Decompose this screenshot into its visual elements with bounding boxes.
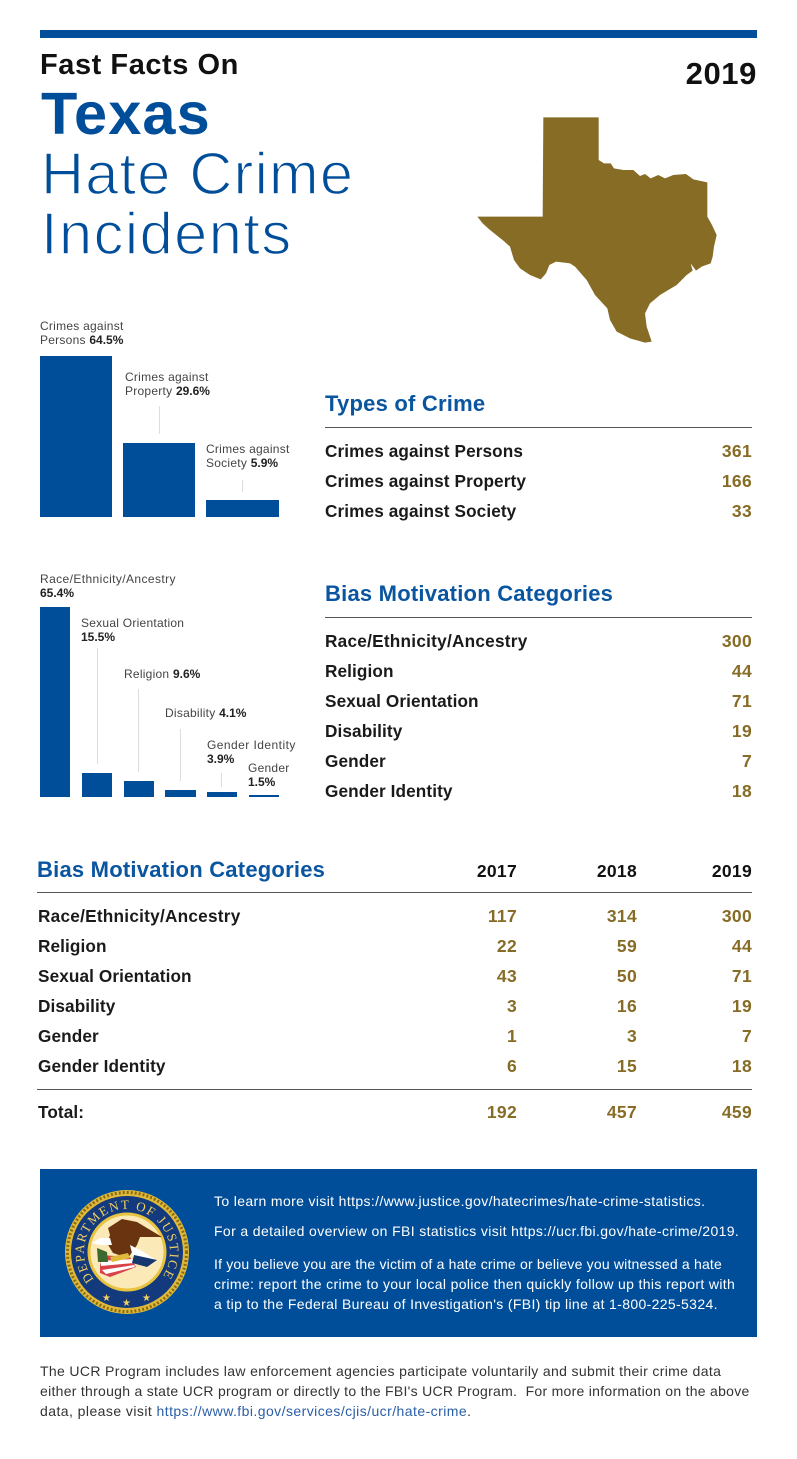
text: report a hate crime: crime: report the crime to your local police then quickly follow up this report with: [214, 1276, 735, 1292]
column headers: [477, 861, 752, 881]
title line: Fast Facts On: Fast Facts On: [40, 49, 239, 81]
top bar: [40, 30, 757, 38]
row: religion: [38, 936, 752, 956]
bar: society: [206, 500, 279, 517]
map of Texas: [477, 117, 717, 343]
icon: Department of Justice seal: DEPARTMENT OF JUSTICE: [75, 1200, 179, 1284]
row: gender: 7: [742, 1026, 752, 1046]
panel: types of crime: [325, 391, 752, 521]
row: disability: Disability: [38, 996, 115, 1016]
label: gender identity: 3.9%: [207, 752, 234, 766]
column headers: 2018: [597, 861, 637, 881]
bar chart: bias motivation: [40, 572, 296, 797]
footer note: [40, 1363, 750, 1419]
row: sexual orientation: Sexual Orientation: [325, 691, 479, 711]
panel: bias motivation categories: [325, 581, 752, 801]
label: gender: [248, 761, 290, 788]
row: gender: 1: [507, 1026, 517, 1046]
label: property: Crimes against: [125, 370, 209, 384]
table heading: Bias Motivation Categories: [37, 857, 325, 882]
row: disability: 19: [732, 996, 752, 1016]
title: [40, 49, 354, 267]
row: race: 117: [488, 906, 517, 926]
row: gender identity: 18: [732, 1056, 752, 1076]
icon: Department of Justice seal: ★: [102, 1293, 111, 1304]
row: gender: 3: [627, 1026, 637, 1046]
row: sexual orientation: 71: [732, 966, 752, 986]
row: gender identity: Gender Identity: [38, 1056, 166, 1076]
icon: Department of Justice seal: [65, 1190, 189, 1314]
column headers: 2019: [712, 861, 752, 881]
footer note: The UCR Program includes law enforcement agencies participate voluntarily and submit their crime data: [40, 1363, 721, 1379]
label: sexual orientation: Sexual Orientation: [81, 616, 184, 630]
row: gender identity: 15: [617, 1056, 637, 1076]
title line: Hate Crime Incidents: Hate Crime: [41, 140, 354, 207]
bar: disability: [165, 790, 196, 797]
label: gender identity: Gender Identity: [207, 738, 296, 752]
row: gender identity: 6: [507, 1056, 517, 1076]
row: total: 457: [607, 1102, 637, 1122]
label: race: [40, 572, 176, 600]
row: race: 314: [607, 906, 637, 926]
row: disability: 3: [507, 996, 517, 1016]
row: society: Crimes against Society: [325, 501, 516, 521]
title line: Texas: Texas: [41, 80, 211, 147]
label: society: Crimes against: [206, 442, 290, 456]
footer note: data, please visit https://www.fbi.gov/services/cjis/ucr/hate-crime.: [40, 1403, 471, 1419]
label: property: Property 29.6%: [125, 384, 210, 398]
row: total: Total:: [38, 1102, 84, 1122]
row: race: Race/Ethnicity/Ancestry: [325, 631, 528, 651]
row: gender: Gender: [325, 751, 386, 771]
bar: race: [40, 607, 70, 797]
label: gender: Gender: [248, 761, 290, 775]
text: report a hate crime: If you believe you are the victim of a hate crime or believe you witnessed a hate: [214, 1256, 722, 1272]
year: 2019: [686, 56, 757, 91]
row: property: Crimes against Property: [325, 471, 526, 491]
row: sexual orientation: 43: [497, 966, 517, 986]
title line: Hate Crime Incidents: [41, 140, 354, 267]
footer note: either through a state UCR program or directly to the FBI's UCR Program. For more information on the above: [40, 1383, 750, 1399]
panel: contact information: [40, 1169, 757, 1337]
heading: Bias Motivation Categories: [325, 581, 613, 606]
label: race: Race/Ethnicity/Ancestry: [40, 572, 176, 586]
row: gender identity: [38, 1056, 752, 1076]
label: persons: [40, 319, 124, 346]
icon: Department of Justice seal: ★: [142, 1293, 151, 1304]
row: religion: 22: [497, 936, 517, 956]
row: disability: [38, 996, 752, 1016]
row: total: 192: [487, 1102, 517, 1122]
label: gender identity: [207, 738, 296, 766]
row: disability: 16: [617, 996, 637, 1016]
value: persons: 361: [722, 441, 752, 461]
row: persons: Crimes against Persons: [325, 441, 523, 461]
icon: Department of Justice seal: ★: [122, 1298, 131, 1309]
row: sexual orientation: 50: [617, 966, 637, 986]
row: religion: 59: [617, 936, 637, 956]
label: disability: Disability 4.1%: [165, 706, 246, 720]
label: sexual orientation: [81, 616, 184, 644]
table: bias motivation by year: [37, 857, 752, 1122]
value: gender identity: 18: [732, 781, 752, 801]
row: total: [38, 1102, 752, 1122]
row: total: 459: [722, 1102, 752, 1122]
value: society: 33: [732, 501, 752, 521]
row: sexual orientation: Sexual Orientation: [38, 966, 192, 986]
label: persons: Persons 64.5%: [40, 332, 123, 346]
text: learn more: To learn more visit https://www.justice.gov/hatecrimes/hate-crime-statistics.: [214, 1193, 705, 1209]
row: sexual orientation: [38, 966, 752, 986]
value: religion: 44: [732, 661, 752, 681]
bar: gender identity: [207, 792, 237, 797]
bar: religion: [124, 781, 154, 797]
value: sexual orientation: 71: [732, 691, 752, 711]
label: property: [125, 370, 210, 398]
text: report a hate crime: a tip to the Federal Bureau of Investigation's (FBI) tip line at 1-800-225-5324.: [214, 1296, 718, 1312]
row: gender identity: Gender Identity: [325, 781, 453, 801]
text: FBI statistics: For a detailed overview on FBI statistics visit https://ucr.fbi.gov/hate-crime/2019.: [214, 1223, 739, 1239]
bar: gender: [249, 795, 279, 797]
row: religion: Religion: [325, 661, 394, 681]
label: religion: Religion 9.6%: [124, 667, 200, 681]
row: gender: [38, 1026, 752, 1046]
value: property: 166: [722, 471, 752, 491]
row: race: Race/Ethnicity/Ancestry: [38, 906, 241, 926]
value: gender: 7: [742, 751, 752, 771]
label: race: 65.4%: [40, 586, 74, 600]
value: disability: 19: [732, 721, 752, 741]
value: race: 300: [722, 631, 752, 651]
title line: Hate Crime Incidents: Incidents: [41, 200, 293, 267]
row: gender: Gender: [38, 1026, 99, 1046]
row: religion: Religion: [38, 936, 107, 956]
label: gender: 1.5%: [248, 774, 275, 788]
row: race: 300: [722, 906, 752, 926]
label: society: [206, 442, 290, 470]
heading: Types of Crime: [325, 391, 485, 416]
row: religion: 44: [732, 936, 752, 956]
bar: sexual orientation: [82, 773, 112, 797]
bar: property: [123, 443, 195, 517]
row: race: [38, 906, 752, 926]
label: society: Society 5.9%: [206, 456, 278, 470]
bar: persons: [40, 356, 112, 517]
label: sexual orientation: 15.5%: [81, 630, 115, 644]
column headers: 2017: [477, 861, 517, 881]
bar chart: types of crime: [40, 319, 290, 517]
text: report a hate crime: [214, 1256, 735, 1312]
row: disability: Disability: [325, 721, 402, 741]
label: persons: Crimes against: [40, 319, 124, 333]
